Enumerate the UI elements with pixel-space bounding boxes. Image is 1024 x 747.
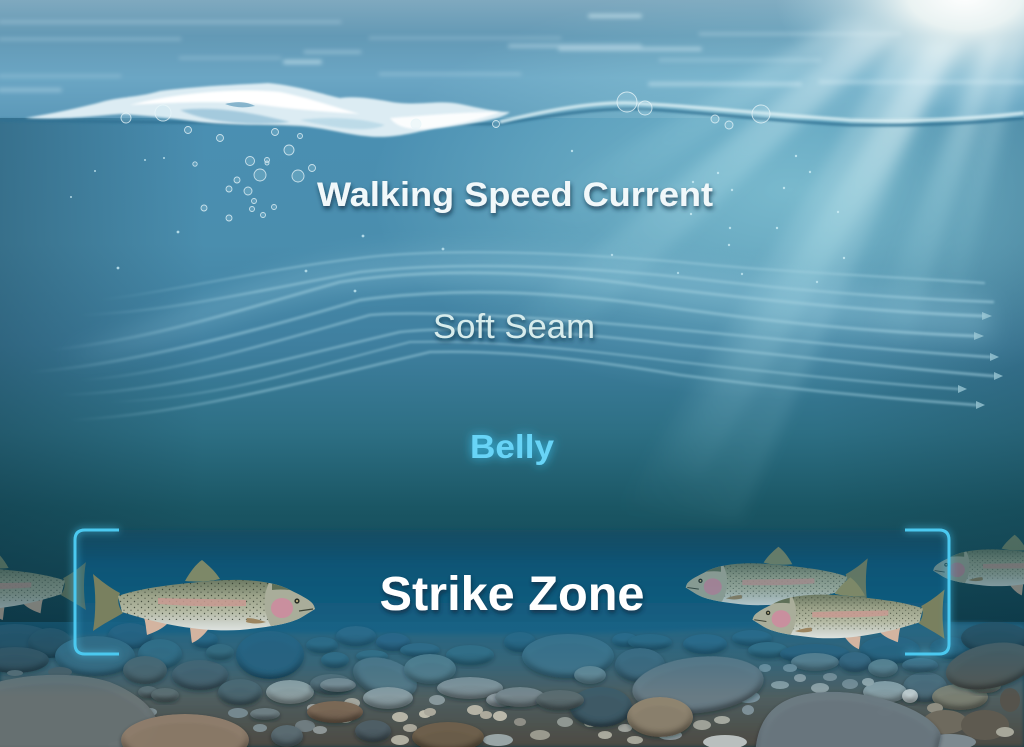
fish: upper right trout — [682, 547, 868, 616]
distant rocks — [0, 622, 1024, 679]
large foreground rocks — [0, 650, 941, 747]
surface ripples — [0, 16, 1024, 90]
label: soft seam: Soft Seam — [433, 308, 595, 346]
light rays — [500, 20, 1024, 520]
label: belly: Belly — [470, 428, 555, 465]
drifting particles — [70, 150, 845, 292]
strike zone panel — [75, 530, 950, 662]
flow lines and arrows — [30, 252, 994, 420]
background: water surface — [0, 0, 1024, 120]
label: strike zone: Strike Zone — [380, 568, 644, 621]
left fish (outside zone, dimmed) — [0, 550, 86, 620]
mid rocks — [123, 634, 1024, 720]
bubbles — [121, 92, 770, 221]
background: lighter right side — [370, 0, 1024, 400]
surface foam — [25, 83, 510, 137]
water line — [0, 109, 1024, 125]
fish: lower right trout — [748, 577, 945, 649]
sun glow — [775, 0, 1024, 110]
label: walking speed current: Walking Speed Current — [317, 176, 713, 214]
right fish (outside zone, dimmed) — [930, 535, 1024, 595]
fish: main left trout — [93, 560, 320, 643]
strike zone bracket: left — [75, 530, 119, 654]
thin surface highlight — [500, 103, 1024, 122]
flow band highlight — [60, 250, 990, 360]
strike zone bracket: right — [905, 530, 949, 654]
pebbles — [7, 664, 1020, 747]
depth haze over far rocks — [0, 622, 1024, 697]
river bed — [0, 622, 1024, 747]
background: side vignette — [0, 118, 1024, 648]
arrowheads — [958, 312, 1003, 409]
